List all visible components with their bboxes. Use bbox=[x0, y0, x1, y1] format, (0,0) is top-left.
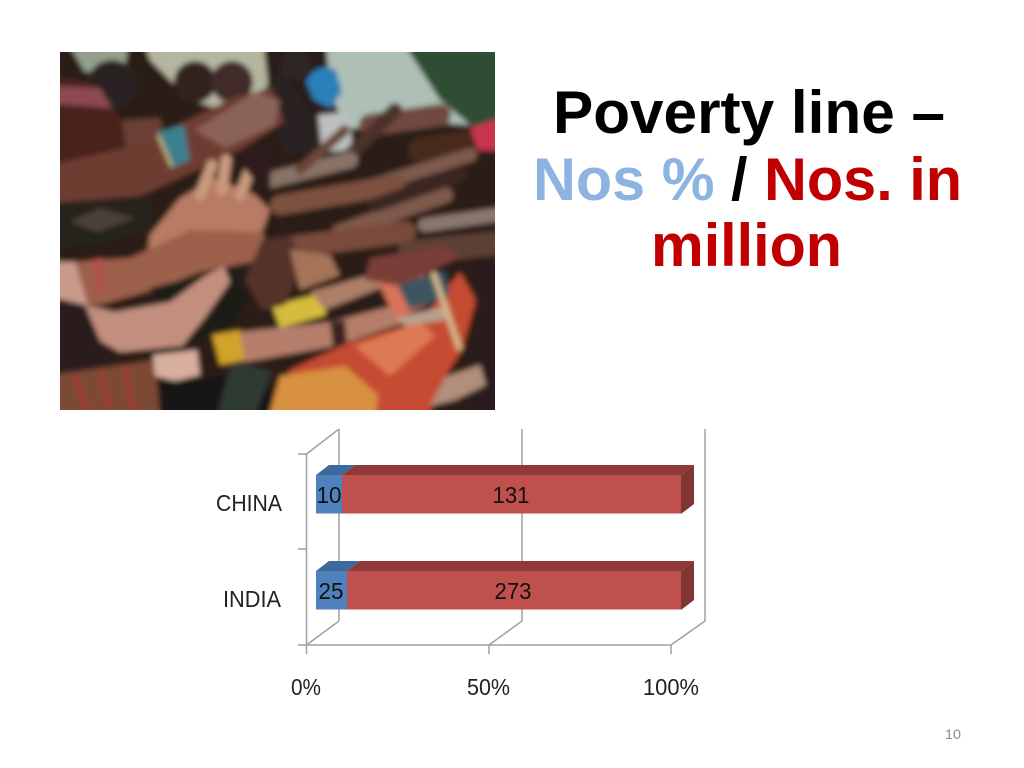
bar: India: 25 bbox=[318, 578, 344, 604]
blue turban bbox=[306, 68, 342, 108]
slide number: 10 bbox=[945, 726, 961, 742]
value axis labels: 100% bbox=[643, 674, 699, 700]
dark gap below arm bbox=[60, 194, 140, 214]
background foliage and sky bbox=[410, 52, 495, 128]
photo: crowd of outstretched hands bbox=[60, 52, 495, 410]
bar: China bbox=[316, 465, 694, 514]
bar: India bbox=[316, 561, 694, 610]
child face bbox=[245, 235, 300, 310]
title: Nos % / Nos. in bbox=[533, 146, 962, 213]
bar: India: 273 bbox=[494, 578, 532, 604]
main left arm bbox=[60, 86, 286, 206]
right-side tangled arms bbox=[270, 110, 530, 252]
title: million bbox=[651, 212, 842, 279]
lower open hand bbox=[85, 266, 230, 352]
bar: China: 10 bbox=[316, 482, 342, 508]
value axis labels: 0% bbox=[291, 674, 321, 700]
bar: China: 131 bbox=[492, 482, 530, 508]
central hand with fingers bbox=[144, 176, 274, 252]
orange and red cloth bbox=[285, 268, 480, 410]
value axis labels: 50% bbox=[467, 674, 510, 700]
title bbox=[533, 79, 962, 279]
second long arm bbox=[73, 229, 268, 308]
category labels: CHINA bbox=[216, 490, 283, 516]
category labels: INDIA bbox=[223, 586, 282, 612]
stacked bar chart: 3D 100% bars for China and India bbox=[216, 429, 705, 700]
value axis labels bbox=[291, 674, 699, 700]
patterned sari bbox=[60, 357, 164, 410]
chart axes and gridlines bbox=[298, 429, 705, 654]
category labels bbox=[216, 490, 283, 612]
left head bbox=[60, 74, 125, 164]
yellow sleeves bbox=[212, 330, 246, 365]
title: Poverty line – bbox=[553, 79, 945, 146]
